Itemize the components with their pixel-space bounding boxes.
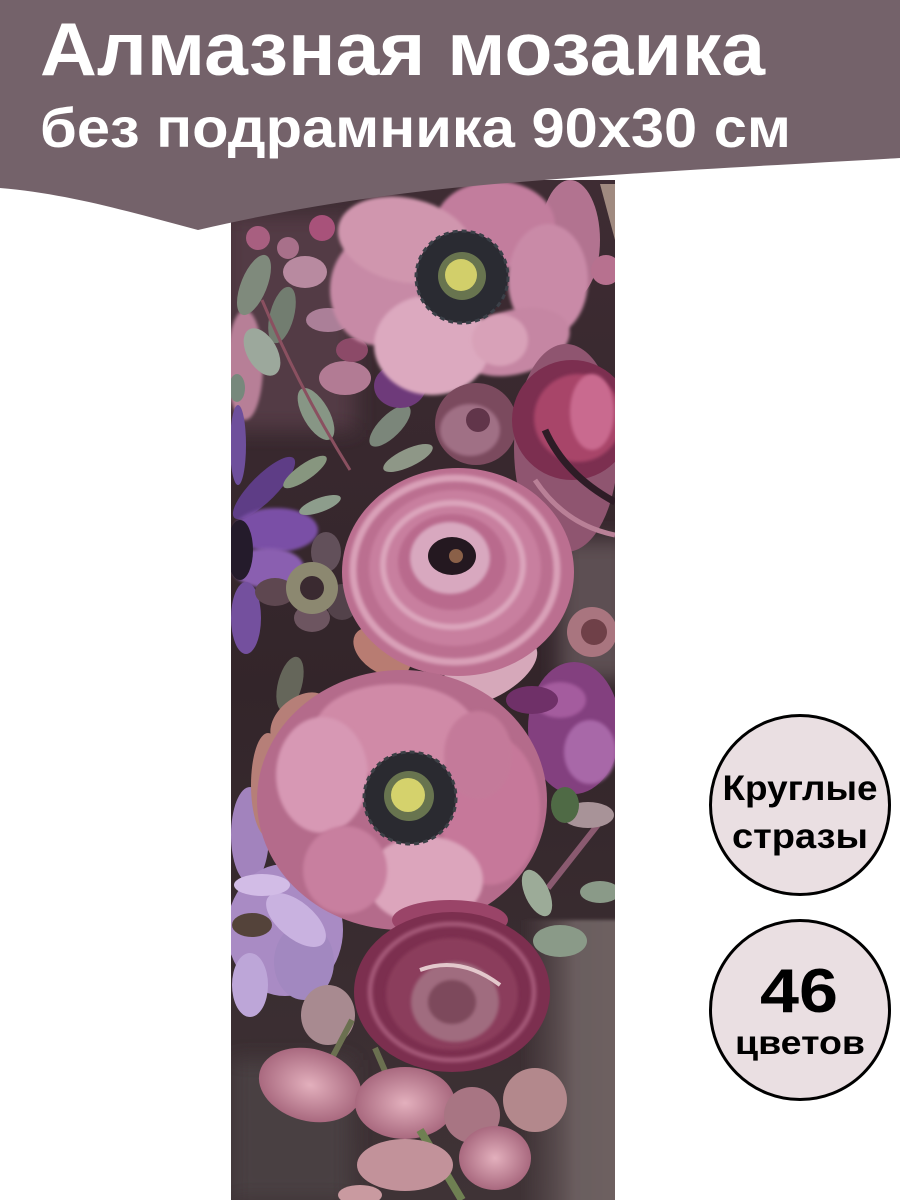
flower: purple dahlia right: [506, 607, 620, 794]
badge: 46 colours: цветов: [735, 1024, 865, 1061]
flower: lavender left: [227, 787, 343, 1017]
icon: poppy stamen ring: [364, 752, 456, 844]
panel: floral mosaic picture: [225, 180, 632, 1200]
flowers: bottom buds: [250, 1037, 567, 1200]
subtitle: без подрамника 90х30 см: [40, 96, 791, 159]
flower: large poppy: [251, 670, 547, 930]
flower: small dark anemone: [255, 532, 358, 632]
flower: top poppy: [330, 180, 621, 395]
header banner: [0, 0, 900, 230]
icon: poppy stamen ring: [416, 231, 508, 323]
foliage: berries cluster: [301, 985, 388, 1078]
badge: round rhinestones: стразы: [732, 817, 868, 856]
badge: 46 colours: [710, 920, 890, 1100]
flower: big ranunculus: [342, 468, 574, 720]
flower: small bud at centre: [435, 383, 517, 465]
foliage: lower right sprig: [522, 787, 615, 957]
title: Алмазная мозаика: [40, 7, 766, 91]
badge: round rhinestones: [710, 716, 890, 894]
flower: wine ranunculus right: [512, 344, 615, 552]
flower: dark rose: [354, 900, 550, 1072]
badge: 46 colours: 46: [760, 957, 838, 1026]
flower: purple clematis left: [225, 405, 343, 714]
foliage: top left sprigs: [225, 215, 436, 478]
badge: round rhinestones: Круглые: [722, 769, 878, 808]
